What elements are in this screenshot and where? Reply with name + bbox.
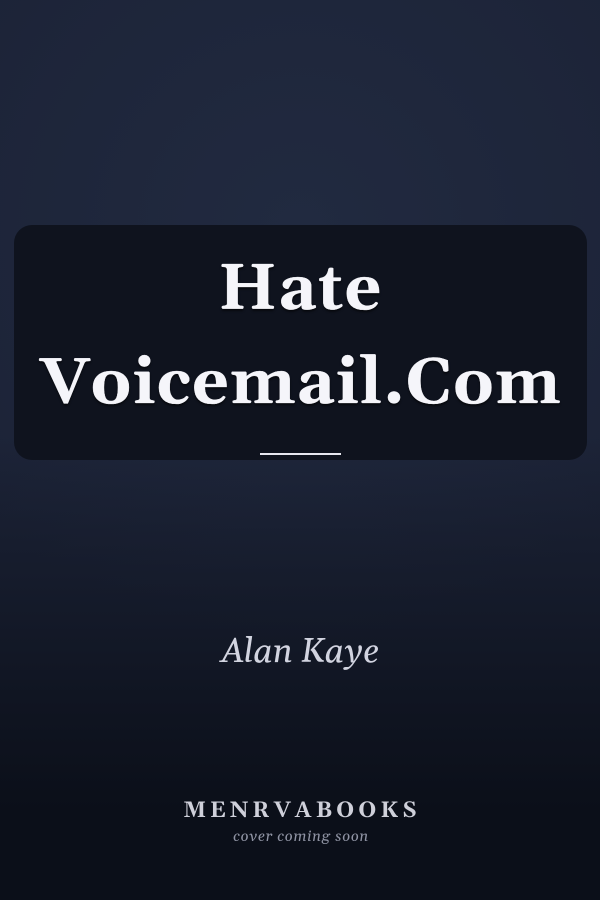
title: line 2: Voicemail.Com: [40, 344, 562, 425]
title panel: [14, 225, 587, 460]
publisher: MENRVABOOKS: [183, 797, 421, 825]
title underline: [260, 453, 341, 455]
author: Alan Kaye: [221, 630, 379, 674]
title: line 1: Hate: [218, 250, 383, 331]
tagline: cover coming soon: [233, 828, 369, 847]
